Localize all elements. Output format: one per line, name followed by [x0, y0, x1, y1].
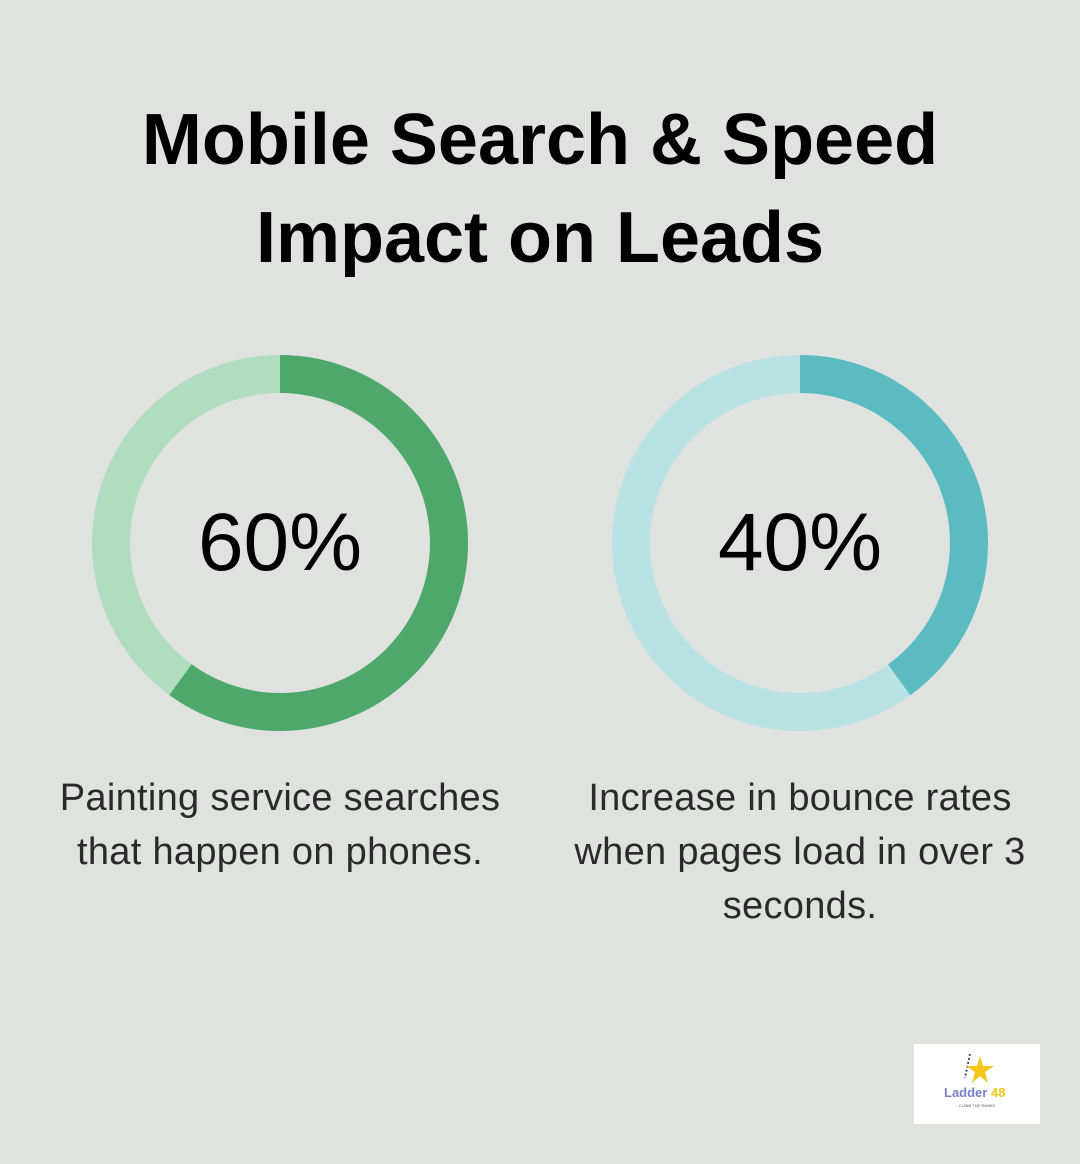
- donut: 40%: 40%: [718, 497, 882, 588]
- donut: 60%: 60%: [198, 497, 362, 588]
- logo: Ladder 48: [944, 1085, 1005, 1100]
- text: right description: Increase in bounce rates when pages load in over 3 seconds.: [574, 777, 1026, 927]
- title: [142, 100, 938, 278]
- logo: [914, 1044, 1040, 1124]
- donut: 40%: [612, 355, 988, 731]
- title: Impact on Leads: [256, 198, 824, 278]
- text: left description: Painting service searches that happen on phones.: [60, 777, 500, 873]
- logo: CLIMB THE RANKS: [959, 1103, 995, 1108]
- title: Mobile Search & Speed: [142, 100, 938, 180]
- donut: 60%: [92, 355, 468, 731]
